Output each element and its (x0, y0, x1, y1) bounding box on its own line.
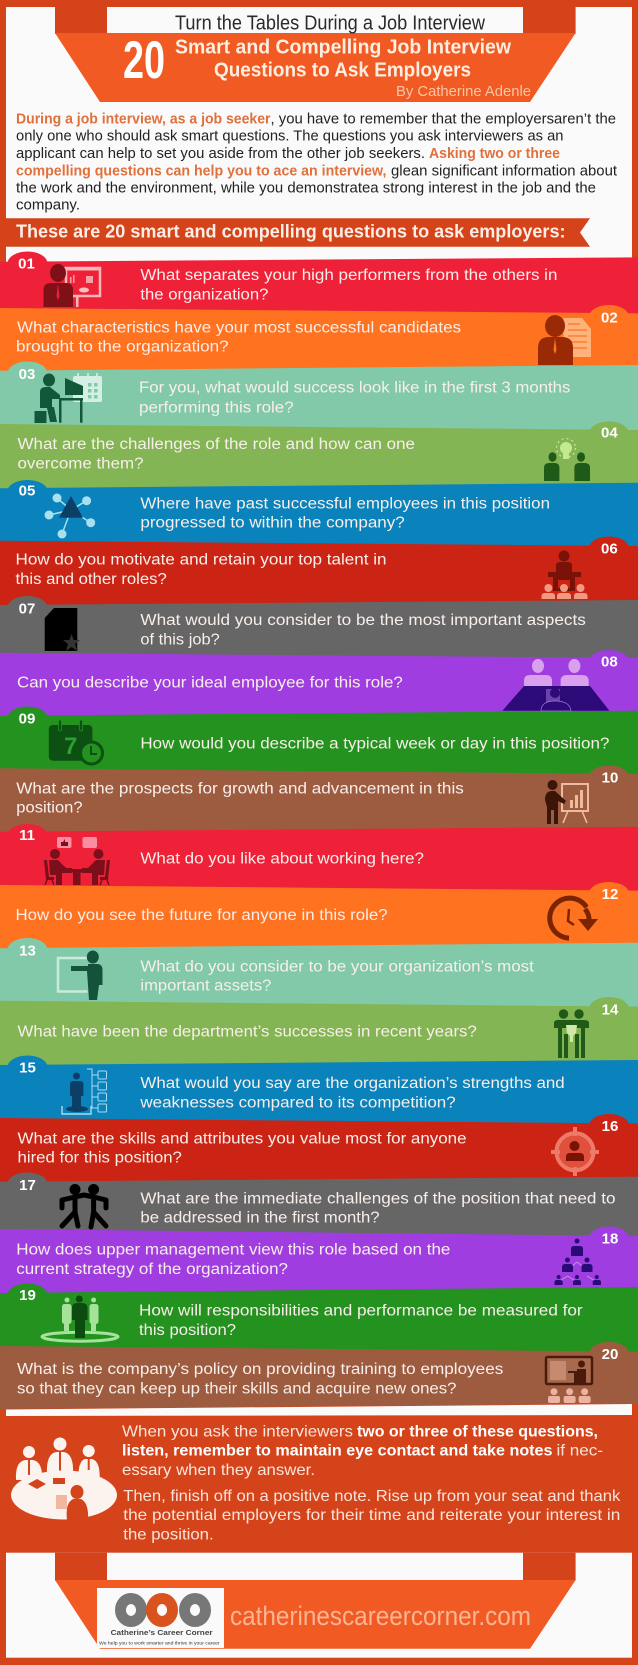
question text: performing this role? (139, 399, 294, 416)
byline: By Catherine Adenle (396, 83, 531, 100)
number: 06 (601, 540, 618, 558)
question 18 (0, 1226, 638, 1296)
question text: hired for this position? (18, 1150, 182, 1167)
question text: current strategy of the organization? (16, 1261, 288, 1278)
question text: What are the challenges of the role and how can one (18, 436, 415, 453)
number: 02 (601, 309, 618, 326)
intro paragraph: the work and the environment, while you demonstratea strong interest in the job and the (16, 179, 596, 196)
closing section (11, 1424, 621, 1543)
question text: What are the skills and attributes you value most for anyone (18, 1130, 466, 1147)
icon: person with document (538, 315, 591, 365)
section banner: These are 20 smart and compelling questions to ask employers: (16, 222, 566, 242)
icon: calendar with clock: 7 (64, 733, 77, 760)
question 03 (0, 362, 638, 432)
question text (140, 958, 535, 995)
header ribbon (55, 7, 576, 102)
question text: What separates your high performers from the others in (140, 267, 557, 284)
number: 17 (19, 1177, 36, 1194)
question text: How do you see the future for anyone in this role? (16, 907, 388, 924)
intro paragraph: , you have to remember that the employersaren’t the (270, 110, 616, 128)
intro paragraph: compelling questions can help you to ace an interview, (16, 162, 386, 179)
icon: calendar with clock (49, 720, 102, 764)
question text: What would you consider to be the most important aspects (140, 612, 586, 629)
question text (139, 1302, 583, 1339)
question 10 (0, 766, 638, 835)
question text: How would you describe a typical week or day in this position? (140, 735, 610, 752)
question text: What would you say are the organization’s strengths and (140, 1075, 565, 1092)
closing text: the potential employers for their time and reiterate your interest in (123, 1507, 620, 1524)
question text (139, 1075, 565, 1112)
intro paragraph: Asking two or three (429, 145, 560, 162)
big number 20: 20 (123, 31, 165, 90)
icon: meeting table (502, 659, 609, 711)
logo (97, 1588, 224, 1648)
icon: presenter and board (44, 264, 101, 307)
icon: organisation pyramid (554, 1238, 601, 1285)
intro paragraph: only one who should ask smart questions. The questions you ask interviewers as an (16, 128, 564, 145)
question 05 (0, 480, 638, 548)
icon: presentation screen with audience (546, 1357, 592, 1403)
question text: be addressed in the first month? (140, 1210, 380, 1227)
number: 16 (602, 1118, 618, 1135)
icon: two people holding trophy (554, 1009, 589, 1058)
question text: How does upper management view this role based on the (16, 1242, 450, 1259)
footer ribbon (6, 1553, 632, 1658)
logo: We help you to work smarter and thrive in your career (99, 1640, 220, 1645)
question text: weaknesses compared to its competition? (139, 1095, 456, 1112)
question text: What are the immediate challenges of the position that need to (140, 1190, 616, 1207)
question text: How will responsibilities and performance be measured for (139, 1302, 583, 1319)
icon: pyramid network (44, 494, 95, 538)
intro paragraph: glean significant information about (391, 162, 618, 179)
question text (18, 436, 415, 472)
question text: of this job? (140, 631, 220, 648)
question text: What are the prospects for growth and advancement in this (16, 780, 464, 797)
icon: person presenting chart (545, 780, 588, 824)
question 17 (0, 1172, 638, 1240)
icon: team of three on ring (42, 1296, 118, 1341)
question text: What do you consider to be your organization’s most (140, 958, 535, 975)
number: 20 (602, 1346, 618, 1363)
icon: document with star (45, 608, 80, 651)
subtitle: Turn the Tables During a Job Interview (175, 12, 485, 34)
number: 05 (19, 483, 35, 500)
question text: What is the company’s policy on providing training to employees (17, 1361, 504, 1378)
question text: progressed to within the company? (140, 515, 405, 532)
number: 08 (601, 654, 618, 671)
question 19 (0, 1284, 638, 1353)
icon: person pointing at board (58, 950, 102, 1000)
question 16 (0, 1114, 638, 1185)
number: 15 (19, 1060, 36, 1077)
question text: the organization? (140, 286, 269, 303)
question 13 (0, 938, 638, 1010)
number: 04 (601, 425, 618, 442)
question text (139, 380, 571, 416)
closing text: two or three of these questions, (357, 1424, 598, 1441)
closing text: Then, finish off on a positive note. Rise up from your seat and thank (123, 1488, 621, 1505)
icon: two people and light bulb (544, 438, 590, 481)
icon: two figures shaking hands (62, 1184, 106, 1227)
question text (140, 267, 557, 303)
question text (140, 495, 550, 532)
intro paragraph: applicant can help to set you aside from the other job seekers. (16, 145, 425, 162)
number: 19 (19, 1287, 36, 1304)
question 01 (0, 252, 638, 315)
number: 13 (19, 943, 36, 960)
question text: this position? (139, 1322, 236, 1339)
question text: What have been the department’s successes in recent years? (18, 1024, 477, 1041)
question text (140, 612, 586, 648)
question text (18, 1130, 466, 1167)
icon: interview panel around table (11, 1438, 117, 1520)
intro paragraph: During a job interview, as a job seeker (16, 110, 271, 128)
icon: speaker at podium with audience (542, 550, 588, 599)
closing text: if nec- (556, 1443, 603, 1460)
question text (16, 551, 386, 588)
main title: Questions to Ask Employers (214, 60, 471, 82)
question text: so that they can keep up their skills and acquire new ones? (17, 1380, 457, 1397)
question 09 (0, 706, 638, 776)
question 11 (0, 824, 638, 893)
number: 03 (19, 366, 35, 383)
white divider strip (6, 1404, 632, 1416)
icon: clock arrow (547, 895, 598, 940)
question text (16, 320, 461, 356)
icon: person with checklist (62, 1069, 106, 1114)
number: 01 (18, 255, 35, 272)
question text (16, 780, 464, 816)
number: 07 (19, 600, 35, 617)
question 15 (0, 1056, 638, 1125)
website address: catherinescareercorner.com (230, 1601, 531, 1631)
icon: person at desk with calendar (34, 373, 102, 423)
number: 09 (19, 710, 35, 727)
intro paragraph (16, 110, 618, 213)
question text (140, 1190, 616, 1227)
question text: What characteristics have your most successful candidates (17, 320, 461, 337)
number: 12 (602, 886, 618, 903)
number: 18 (602, 1230, 618, 1247)
closing text: listen, remember to maintain eye contact and take notes (122, 1443, 553, 1460)
number: 10 (602, 769, 618, 786)
question text: Can you describe your ideal employee for this role? (17, 674, 403, 691)
question text: brought to the organization? (16, 339, 229, 356)
section banner (0, 218, 590, 247)
question 02 (0, 305, 638, 372)
closing text: When you ask the interviewers (122, 1424, 353, 1441)
number: 11 (19, 827, 35, 844)
closing text (122, 1424, 621, 1543)
question text: this and other roles? (16, 571, 167, 588)
question 06 (0, 536, 638, 607)
logo: Catherine’s Career Corner (111, 1628, 213, 1637)
closing text: the position. (123, 1526, 214, 1543)
question text: What do you like about working here? (140, 850, 424, 867)
question 08 (0, 650, 638, 718)
question text (17, 1361, 504, 1397)
question text: Where have past successful employees in this position (140, 495, 550, 512)
icon: target on person (551, 1127, 599, 1176)
question 14 (0, 997, 638, 1067)
question 12 (0, 882, 638, 955)
question 04 (0, 422, 638, 490)
question text: overcome them? (18, 455, 144, 472)
question text: position? (16, 799, 83, 816)
question text: important assets? (140, 978, 272, 995)
intro paragraph: company. (16, 196, 80, 213)
main title: Smart and Compelling Job Interview (175, 36, 511, 58)
question 07 (0, 596, 638, 660)
question text (16, 1242, 450, 1278)
question text: For you, what would success look like in the first 3 months (139, 380, 571, 397)
number: 14 (602, 1001, 619, 1018)
main title (175, 36, 511, 82)
icon: two people at table with speech bubbles (44, 837, 110, 885)
question 20 (0, 1342, 638, 1409)
closing text: essary when they answer. (122, 1462, 315, 1479)
question text: How do you motivate and retain your top talent in (16, 551, 386, 568)
